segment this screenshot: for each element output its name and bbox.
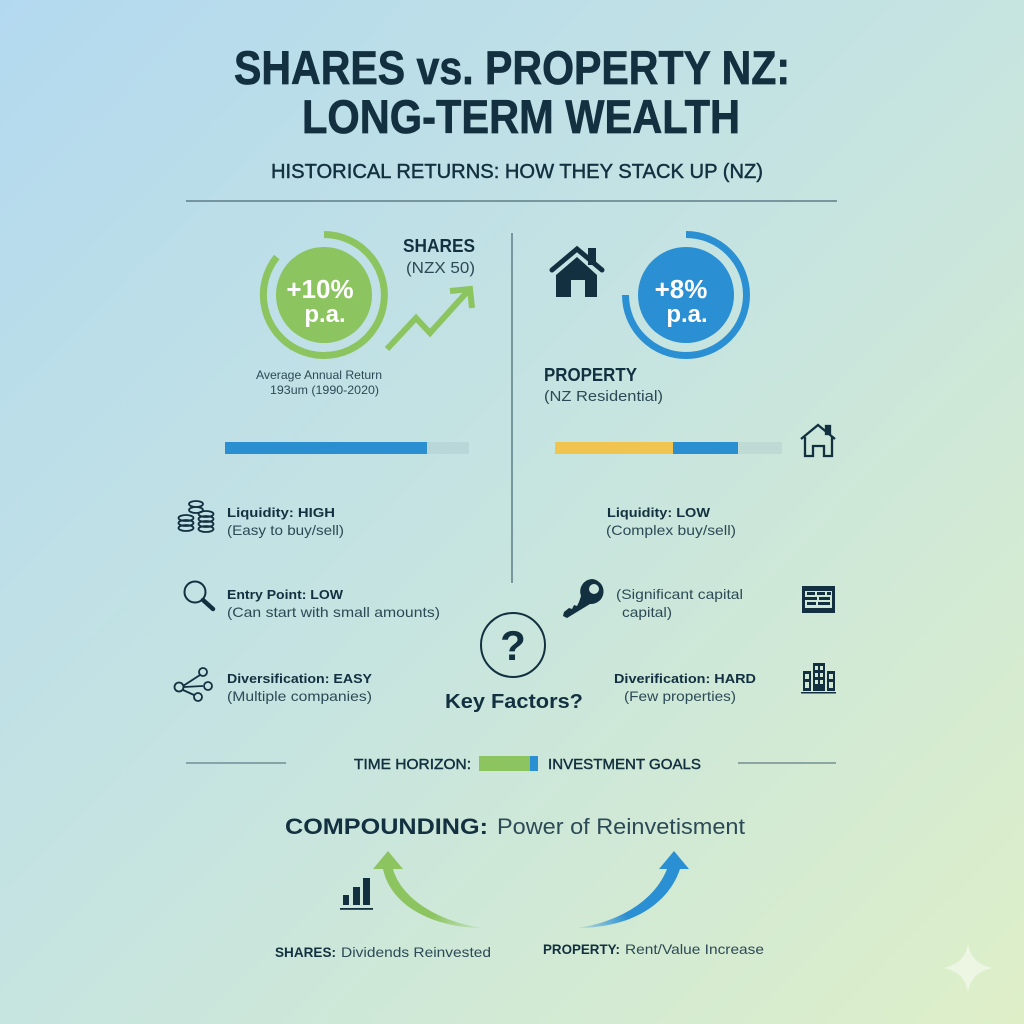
- blue curved arrow: [577, 851, 689, 928]
- property label: (NZ Residential): [544, 388, 663, 405]
- row: diversification easy: (Multiple companies): [227, 688, 372, 704]
- title: SHARES vs. PROPERTY NZ:: [234, 41, 790, 94]
- shares return dial: p.a.: [304, 301, 346, 328]
- time horizon row: TIME HORIZON:: [354, 756, 471, 773]
- row: entry capital: capital): [622, 604, 672, 620]
- panel: shares: [225, 234, 475, 454]
- icon: solid house: [552, 248, 602, 297]
- title: [234, 41, 790, 143]
- icon: office building: [801, 663, 836, 694]
- row: diversification hard: Diverification: HARD: [614, 671, 756, 686]
- shares reinvest label: SHARES:: [275, 944, 336, 960]
- sparkle watermark: [944, 944, 992, 992]
- property reinvest label: [543, 941, 764, 957]
- icon: coins: [178, 501, 214, 532]
- row: entry capital: (Significant capital: [616, 586, 743, 602]
- average return caption: [256, 368, 382, 397]
- row: diversification hard: [614, 663, 836, 704]
- shares label: (NZX 50): [406, 260, 475, 277]
- panel: property: [544, 234, 835, 456]
- row: entry capital: [563, 579, 835, 620]
- property label: PROPERTY: [544, 365, 637, 385]
- shares label: [403, 236, 475, 277]
- title: LONG-TERM WEALTH: [302, 90, 740, 143]
- row: liquidity low: [606, 505, 736, 538]
- row: diversification easy: Diversification: EASY: [227, 671, 372, 686]
- row: entry point low: [184, 582, 440, 620]
- row: liquidity high: Liquidity: HIGH: [227, 505, 335, 520]
- row: liquidity high: (Easy to buy/sell): [227, 522, 344, 538]
- icon: bar chart: [340, 878, 373, 910]
- shares label: SHARES: [403, 236, 475, 256]
- row: diversification easy: [174, 668, 372, 704]
- icon: brick wall: [802, 586, 835, 613]
- property label: [544, 365, 663, 405]
- compounding heading: [285, 814, 745, 839]
- icon: rising arrow: [387, 289, 472, 349]
- property reinvest label: PROPERTY:: [543, 941, 620, 957]
- property return dial: [626, 234, 746, 356]
- property return dial: p.a.: [666, 301, 708, 328]
- time horizon row: INVESTMENT GOALS: [548, 756, 701, 773]
- icon: key: [563, 579, 604, 618]
- subtitle: HISTORICAL RETURNS: HOW THEY STACK UP (NZ): [271, 161, 763, 183]
- row: entry point low: Entry Point: LOW: [227, 587, 344, 602]
- shares reinvest label: [275, 944, 491, 960]
- icon: magnifier: [184, 582, 213, 609]
- property reinvest label: Rent/Value Increase: [625, 941, 764, 957]
- row: diversification hard: (Few properties): [624, 688, 736, 704]
- average return caption: Average Annual Return: [256, 368, 382, 382]
- property progress bar: [555, 442, 782, 454]
- icon: share network: [174, 668, 212, 701]
- time horizon row: [354, 756, 701, 773]
- key factors: ?: [500, 622, 526, 669]
- shares return dial: +10%: [286, 274, 354, 304]
- shares progress bar: [225, 442, 469, 454]
- row: entry point low: (Can start with small amounts): [227, 604, 440, 620]
- shares reinvest label: Dividends Reinvested: [341, 944, 491, 960]
- average return caption: 193um (1990-2020): [270, 383, 379, 397]
- property return dial: +8%: [655, 274, 707, 304]
- icon: outline house: [801, 425, 835, 456]
- shares return dial: [263, 234, 384, 355]
- green curved arrow: [373, 851, 483, 928]
- row: liquidity low: Liquidity: LOW: [607, 505, 711, 520]
- row: liquidity low: (Complex buy/sell): [606, 522, 736, 538]
- key factors: Key Factors?: [445, 691, 583, 713]
- compounding heading: Power of Reinvetisment: [497, 814, 745, 839]
- compounding heading: COMPOUNDING:: [285, 814, 488, 839]
- key factors: [445, 613, 583, 713]
- row: liquidity high: [178, 501, 344, 538]
